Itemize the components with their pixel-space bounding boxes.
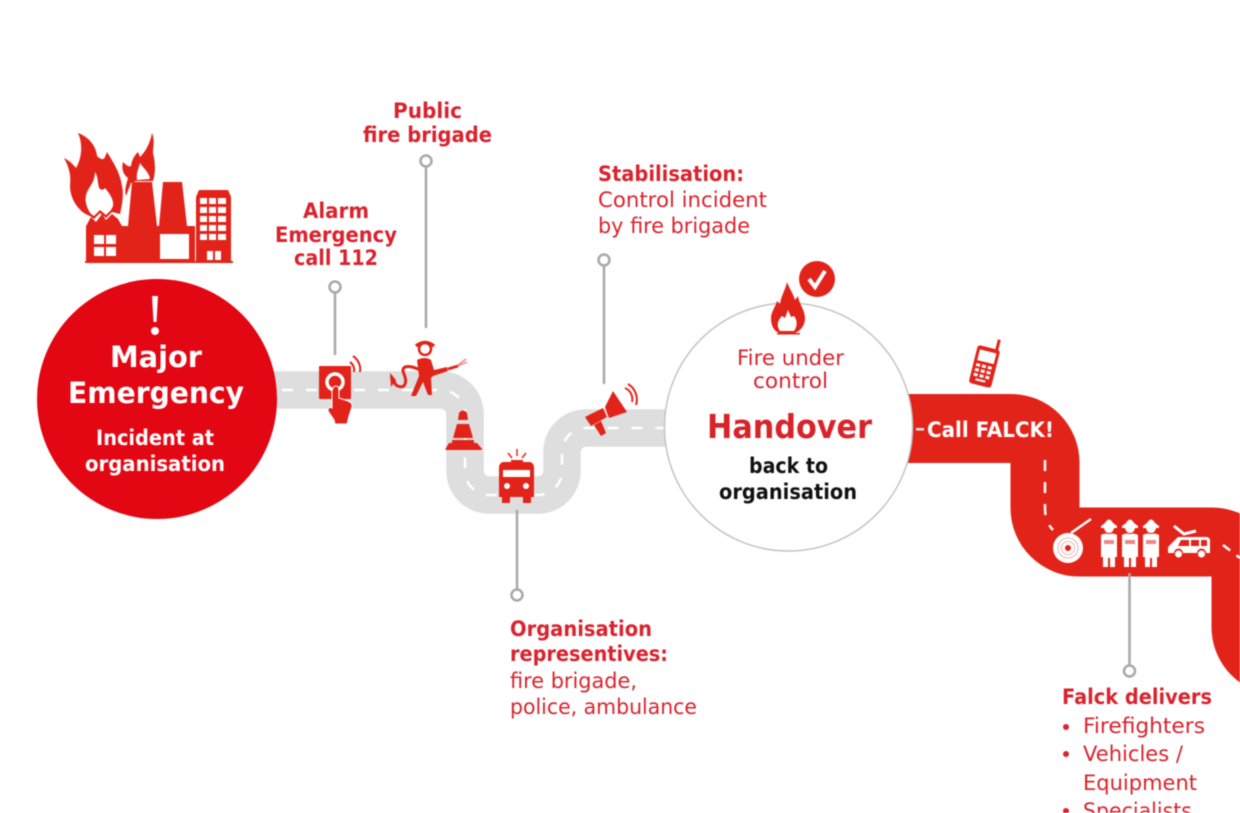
- text: incident at organisation: Incident at: [96, 426, 214, 450]
- label: stabilisation: Stabilisation:: [598, 162, 744, 186]
- connector: public fire brigade: [420, 156, 432, 328]
- icon: fire hose: [1053, 519, 1091, 563]
- label: public fire brigade: [363, 99, 492, 147]
- icon: rescue vehicle: [1168, 526, 1210, 558]
- label: falck delivers list: [1062, 685, 1212, 813]
- red road: Falck phase: [900, 428, 1240, 661]
- label: alarm emergency call: Alarm: [303, 199, 369, 223]
- label: organisation representatives: Organisation: [510, 617, 652, 641]
- label: falck delivers list: Firefighters: [1083, 714, 1205, 738]
- label: stabilisation: Control incident: [598, 188, 767, 212]
- icon: check badge: [799, 261, 835, 297]
- label: stabilisation: by fire brigade: [598, 214, 750, 238]
- icon: firefighter team: [1101, 520, 1159, 567]
- icon: megaphone: [585, 384, 637, 436]
- label: organisation representatives: representives:: [510, 642, 668, 666]
- label: organisation representatives: fire brigade,: [510, 669, 637, 693]
- label: falck delivers list: Falck delivers: [1062, 685, 1212, 709]
- icon: mobile phone: [969, 335, 1003, 388]
- icon: flame under control: [771, 282, 805, 334]
- label: falck delivers list: Vehicles /: [1083, 742, 1184, 766]
- text: back to organisation: organisation: [719, 480, 857, 504]
- text: fire under control: [737, 346, 844, 393]
- heading: Major Emergency: Emergency: [68, 376, 244, 410]
- text: incident at organisation: organisation: [85, 452, 225, 476]
- text: call falck: Call FALCK!: [927, 418, 1054, 442]
- heading: Major Emergency: Major: [110, 340, 203, 374]
- icon: firefighter with hose: [390, 342, 467, 396]
- handover circle: [664, 303, 912, 551]
- label: alarm emergency call: [275, 199, 397, 270]
- connector: falck delivers: [1124, 573, 1135, 676]
- text: fire under control: Fire under: [737, 346, 844, 370]
- text: incident at organisation: [85, 426, 225, 476]
- label: organisation representatives: [510, 617, 697, 719]
- connector: stabilisation: [598, 254, 610, 384]
- icon: traffic cone: [446, 410, 482, 450]
- label: public fire brigade: Public: [393, 99, 462, 123]
- icon: alarm button: [319, 356, 360, 424]
- label: falck delivers list: Equipment: [1083, 771, 1197, 795]
- icon: exclamation mark: [151, 296, 159, 335]
- grey road: organisation phase: [270, 390, 680, 495]
- text: back to organisation: [719, 454, 857, 504]
- label: organisation representatives: police, ambulance: [510, 695, 697, 719]
- icon: burning factory: [64, 133, 233, 263]
- heading: Handover: Handover: [707, 407, 873, 446]
- major emergency circle: [37, 279, 277, 519]
- text: fire under control: control: [753, 369, 828, 393]
- heading: Major Emergency: [68, 340, 244, 410]
- connector: alarm: [330, 282, 340, 355]
- text: back to organisation: back to: [749, 454, 828, 478]
- label: alarm emergency call: call 112: [294, 246, 378, 270]
- label: public fire brigade: fire brigade: [363, 123, 492, 147]
- icon: fire truck: [499, 449, 534, 503]
- label: alarm emergency call: Emergency: [275, 223, 397, 247]
- connector: organisation representatives: [512, 510, 522, 600]
- label: stabilisation: [598, 162, 767, 238]
